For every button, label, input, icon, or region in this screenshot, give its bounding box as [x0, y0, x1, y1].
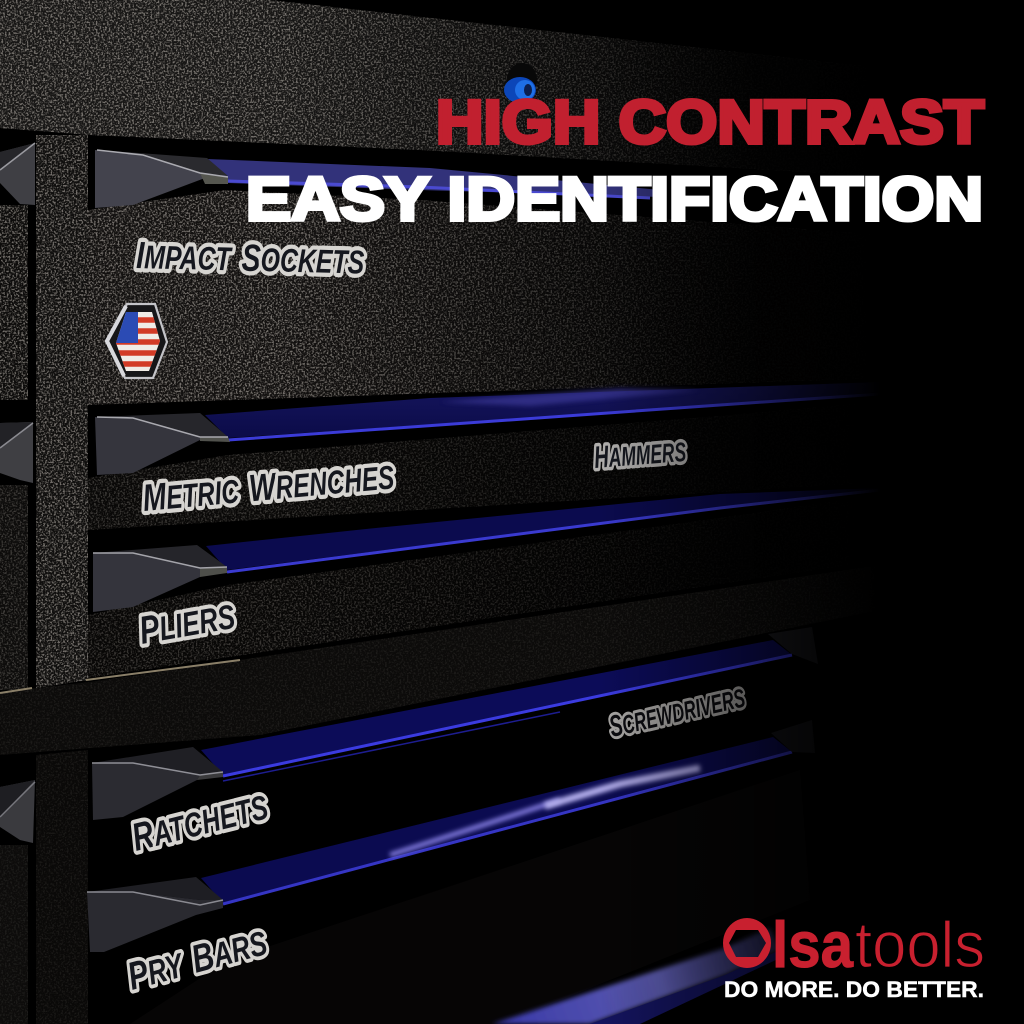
- heading: High Contrast: HIGH CONTRAST: [436, 88, 984, 156]
- drawer one label: Impact Sockets: IMPACT SOCKETS: [136, 235, 365, 283]
- wordmark: tools: [855, 908, 985, 981]
- horizontal rail: [0, 565, 880, 755]
- drawer four pull: [92, 627, 818, 820]
- drawer one pull: [95, 150, 660, 208]
- drawer three face: [88, 495, 880, 678]
- icon: hex nut letter O: [723, 918, 771, 968]
- drawer three label: Pliers: PLIERS: [136, 594, 238, 653]
- top slab of cabinet: [0, 0, 880, 176]
- drawer two pull: [95, 382, 880, 475]
- lower column: [36, 750, 88, 1024]
- wordmark: lsa: [772, 908, 854, 981]
- drawer two label: Metric Wrenches: METRIC WRENCHES: [141, 455, 396, 520]
- drawer two label: Hammers: HAMMERS: [593, 433, 687, 475]
- drawer four label: Screwdrivers: SCREWDRIVERS: [606, 681, 748, 744]
- drawer five face: [130, 770, 810, 1024]
- blue bolt: [504, 63, 537, 103]
- toolbox cabinet: [0, 0, 808, 1024]
- left neighbouring drawer pulls: [0, 143, 35, 843]
- drawer one face: [88, 190, 880, 405]
- drawer four label: Ratchets: RATCHETS: [128, 785, 272, 860]
- title: [246, 88, 984, 233]
- rail highlight edge: [0, 660, 240, 693]
- drawer five label: Pry Bars: PRY BARS: [123, 920, 272, 999]
- drawer two face: [88, 402, 880, 530]
- logo: Olsatools: [723, 908, 985, 1002]
- tagline: DO MORE. DO BETTER.: [724, 977, 984, 1002]
- vertical column: [36, 135, 88, 688]
- right edge darkening: [600, 0, 1024, 1024]
- heading: Easy Identification: EASY IDENTIFICATION: [246, 165, 983, 233]
- drawer five pull: [87, 720, 815, 952]
- drawer six pull: [492, 928, 780, 1024]
- drawer three pull: [93, 488, 880, 612]
- icon: American flag hex badge: [106, 304, 167, 378]
- left side panels: [0, 205, 28, 1024]
